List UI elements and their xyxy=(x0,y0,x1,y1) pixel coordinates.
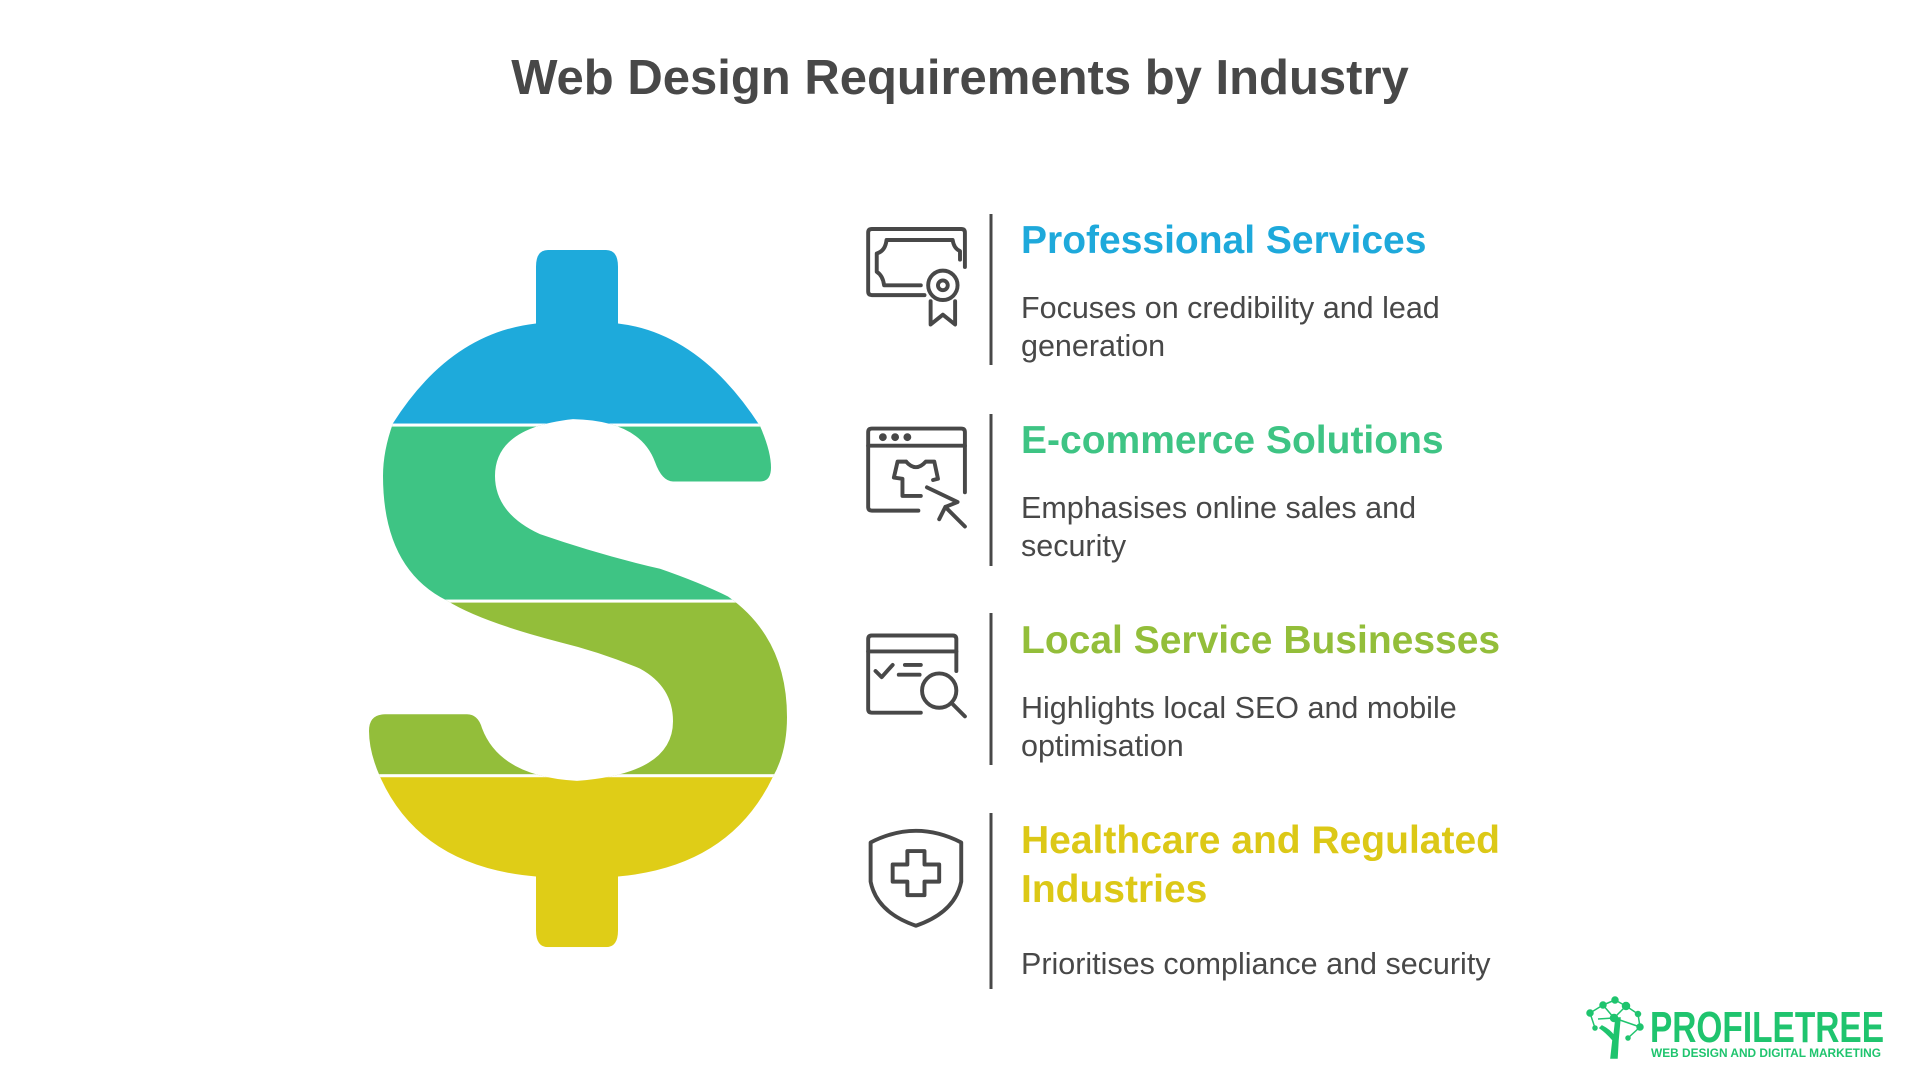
block 3: optimisation xyxy=(1021,729,1184,763)
icon: certificate xyxy=(868,229,965,324)
block 2 xyxy=(1021,419,1444,563)
icons xyxy=(868,229,965,926)
icon: ecommerce xyxy=(868,429,965,527)
block 3: Highlights local SEO and mobile xyxy=(1021,691,1457,725)
block 4: Prioritises compliance and security xyxy=(1021,947,1491,981)
title: Web Design Requirements by Industry xyxy=(511,51,1409,105)
block 2: Emphasises online sales and xyxy=(1021,491,1416,525)
dividers xyxy=(990,214,992,989)
block 4: Healthcare and Regulated xyxy=(1021,819,1500,862)
block 3: Local Service Businesses xyxy=(1021,619,1500,662)
logo xyxy=(1587,997,1884,1060)
block 1: generation xyxy=(1021,329,1165,363)
block 2: security xyxy=(1021,529,1127,563)
block 1 xyxy=(1021,219,1440,363)
block 1: Focuses on credibility and lead xyxy=(1021,291,1440,325)
block 3 xyxy=(1021,619,1500,763)
block 2: E-commerce Solutions xyxy=(1021,419,1444,462)
icon: shield xyxy=(871,831,961,926)
dollar sign xyxy=(360,236,800,969)
block 4: Industries xyxy=(1021,868,1207,911)
logo: WEB DESIGN AND DIGITAL MARKETING xyxy=(1651,1046,1881,1060)
block 1: Professional Services xyxy=(1021,219,1426,262)
icon: local search xyxy=(868,636,965,716)
block 4 xyxy=(1021,819,1500,981)
